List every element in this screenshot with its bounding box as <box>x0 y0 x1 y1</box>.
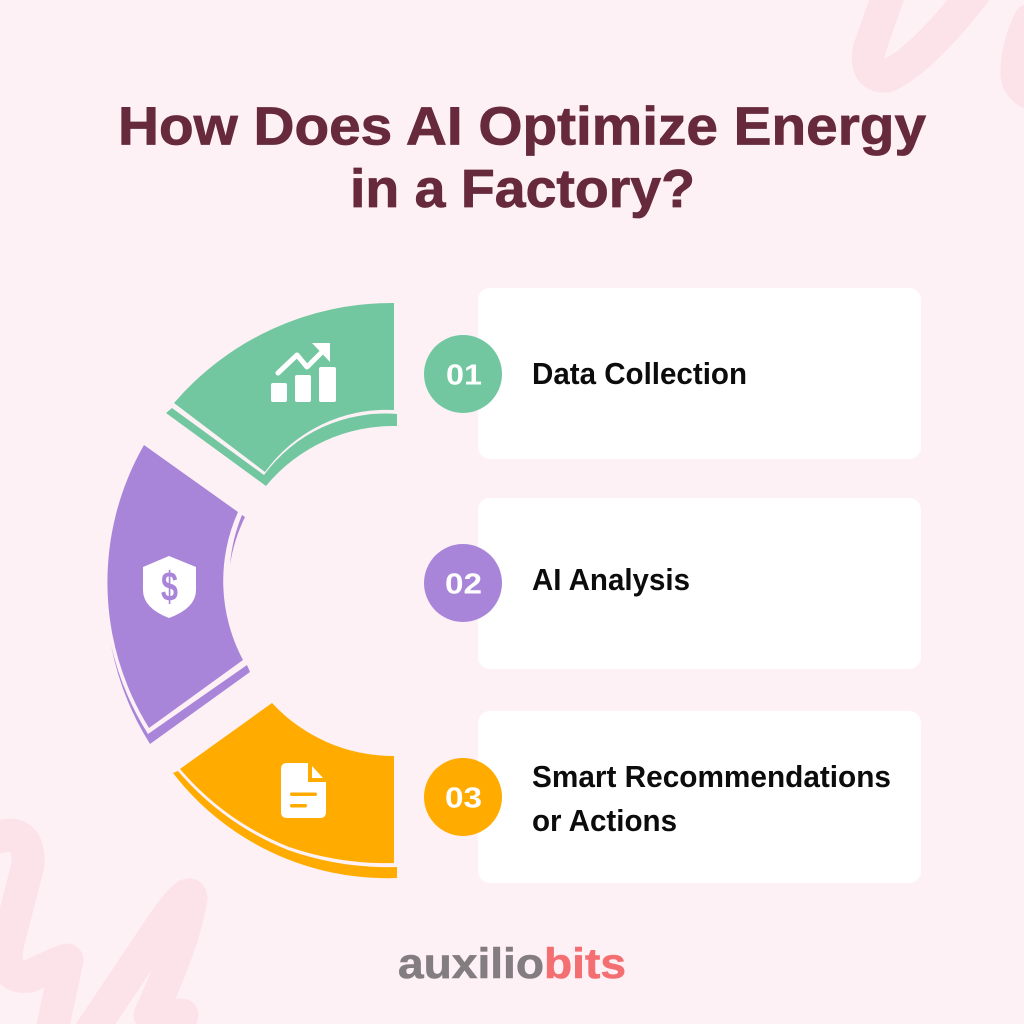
badge 03: 03 <box>445 782 482 814</box>
badge 01: 01 <box>446 360 482 392</box>
logo: auxiliobits <box>398 940 626 988</box>
title: How Does AI Optimize Energy <box>118 96 926 156</box>
segment: orange smart recommendations <box>173 703 397 878</box>
label: ai analysis: AI Analysis <box>532 562 690 597</box>
label: smart recommendations <box>532 759 891 838</box>
badge 02 <box>424 544 502 622</box>
label: data collection: Data Collection <box>532 356 747 391</box>
badge 03 <box>424 758 502 836</box>
label: smart recommendations: or Actions <box>532 803 677 838</box>
icon: shield with dollar <box>143 556 196 618</box>
card: smart recommendations <box>424 711 921 883</box>
badge 01 <box>424 335 502 413</box>
label: smart recommendations: Smart Recommendations <box>532 759 891 794</box>
badge 02: 02 <box>445 568 482 600</box>
icon: document <box>281 763 326 818</box>
segment: purple ai analysis <box>107 445 250 744</box>
icon: rising chart <box>271 343 336 402</box>
icon: shield with dollar: $ <box>161 563 178 610</box>
card: ai analysis <box>424 498 921 669</box>
title <box>118 96 926 219</box>
card: data collection <box>424 288 921 459</box>
title: in a Factory? <box>350 159 695 219</box>
segment: green data collection <box>166 303 397 486</box>
